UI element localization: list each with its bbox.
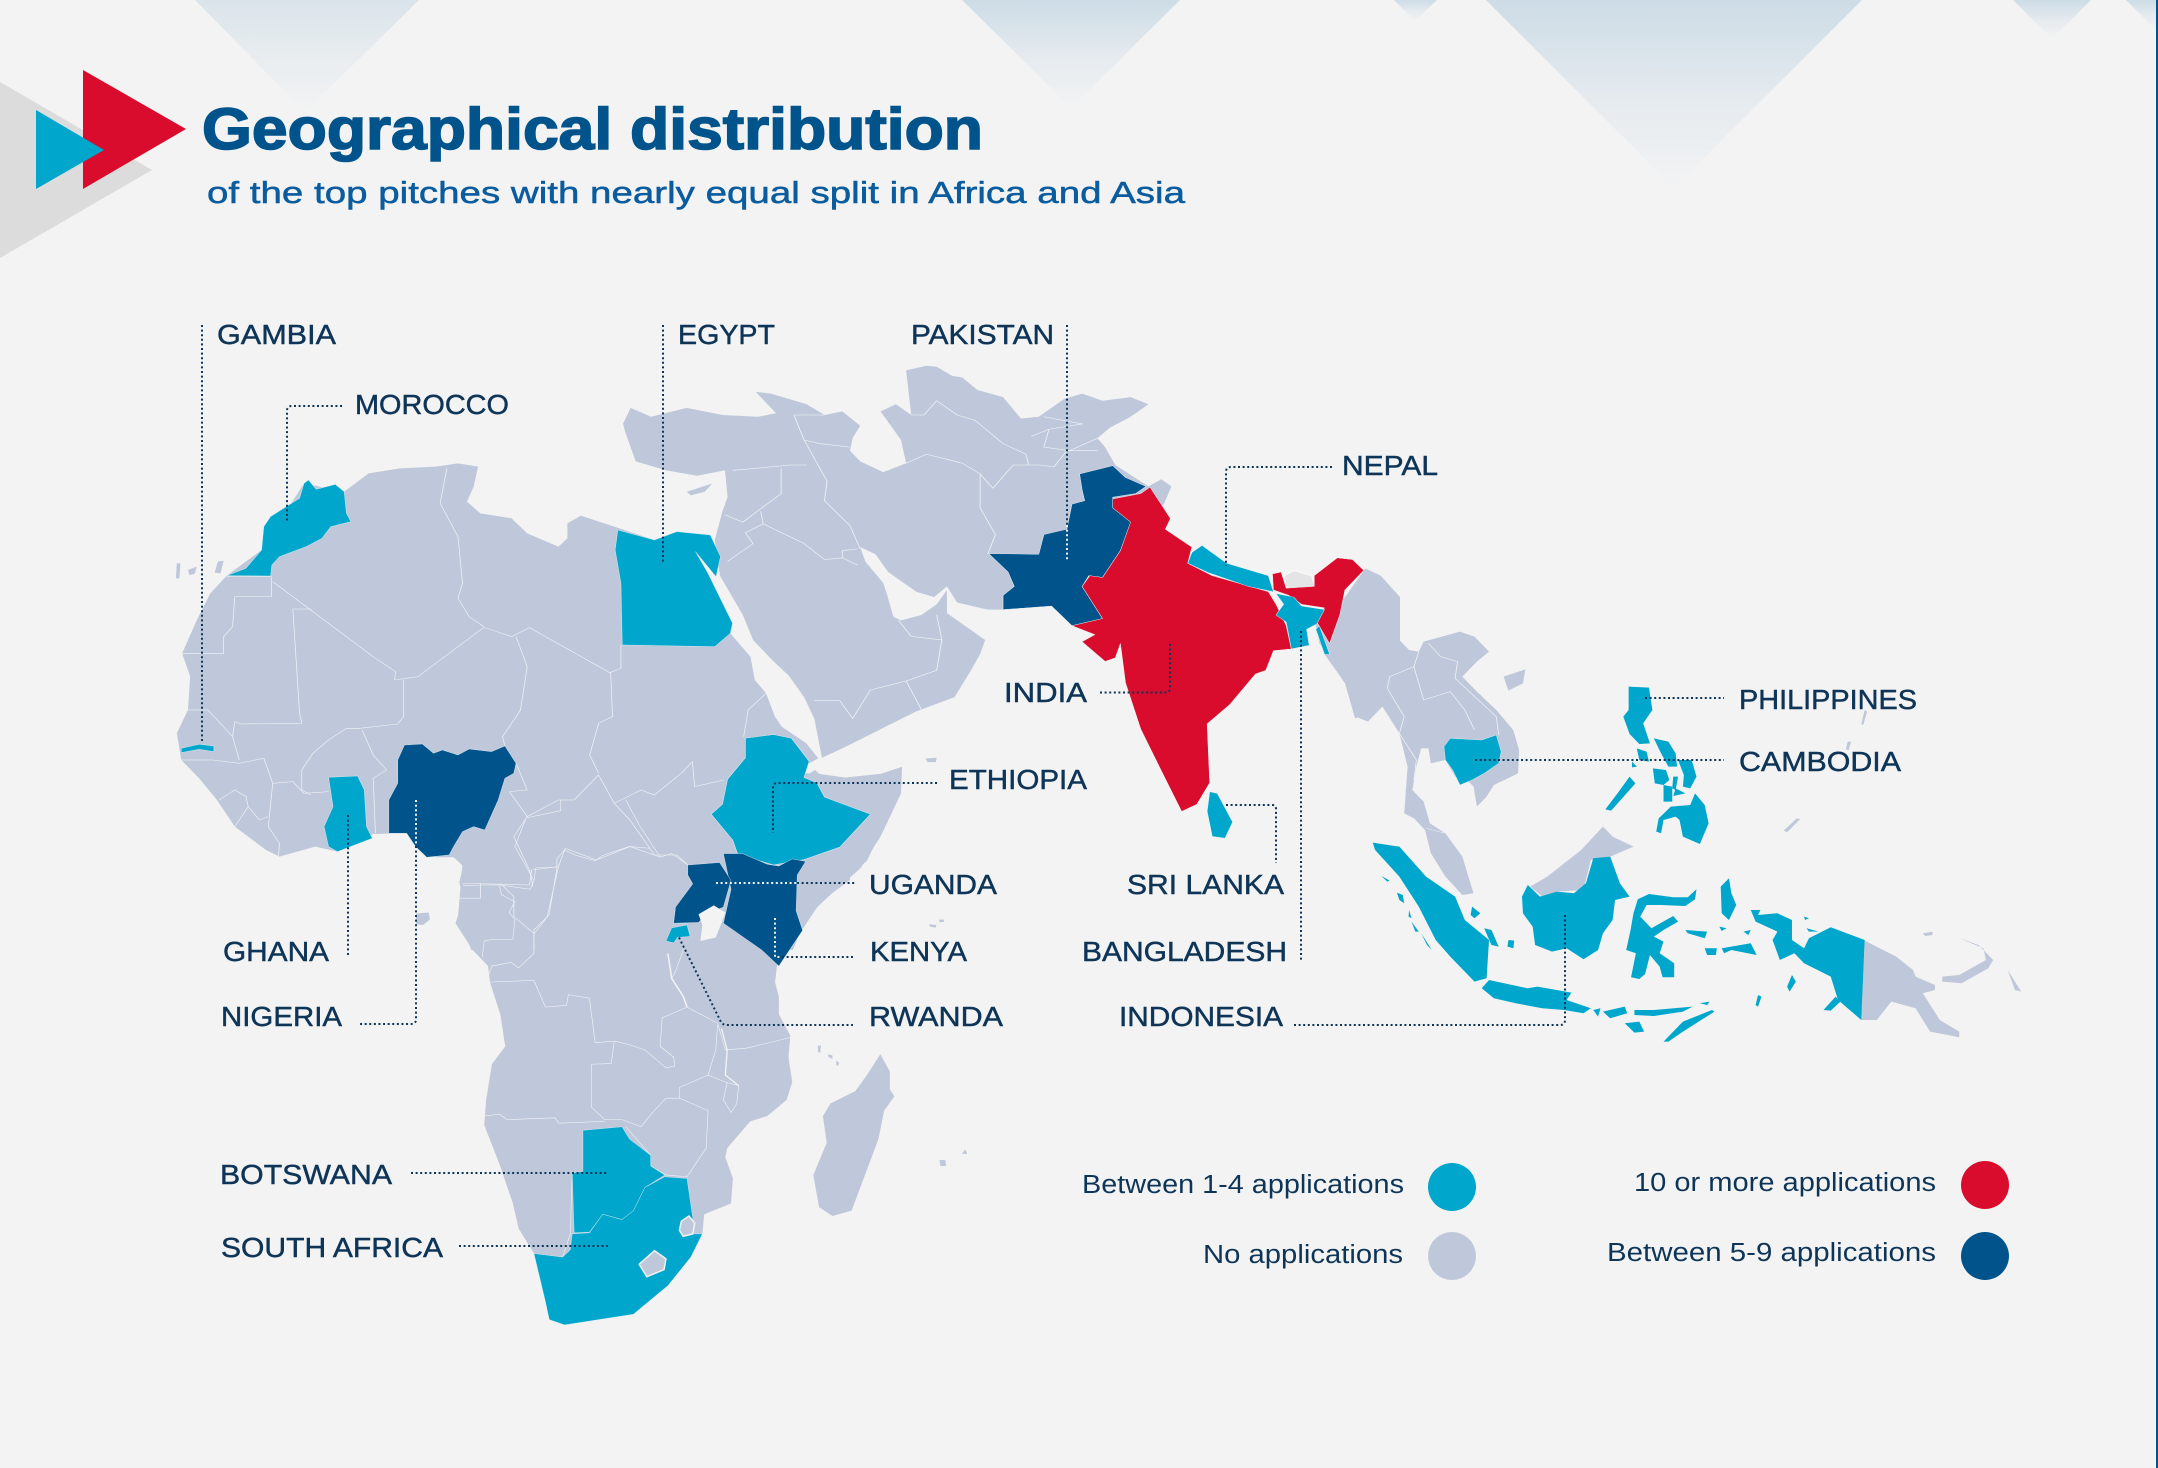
callout: Ghana: GHANA [223, 936, 330, 967]
borders: Middle East and Central Asia [725, 401, 1097, 719]
callout: Indonesia: INDONESIA [1119, 1001, 1284, 1032]
country: Cambodia [1444, 735, 1501, 785]
country: Morocco [227, 480, 351, 576]
legend item: no applications: No applications [1203, 1241, 1403, 1269]
callout: Sri Lanka [1127, 805, 1285, 900]
country: India [1072, 487, 1364, 811]
country: Nigeria [389, 744, 516, 857]
land: South-East Asia and New Guinea [1315, 620, 2021, 1037]
callout: Uganda: UGANDA [869, 869, 998, 900]
callout: Pakistan: PAKISTAN [911, 319, 1054, 350]
country: Egypt [615, 530, 733, 647]
background triangles [195, 0, 2156, 188]
right edge bar [2156, 0, 2158, 1468]
callout: Nepal: NEPAL [1342, 450, 1438, 481]
borders: north and west Africa [181, 468, 766, 950]
country: Indonesia [1373, 843, 1865, 1042]
legend item: between 1-4 applications [1082, 1163, 1476, 1211]
subtitle: of the top pitches with nearly equal split in Africa and Asia [207, 175, 1186, 210]
country: Nepal [1188, 545, 1273, 592]
countries: Kenya and Uganda [674, 854, 806, 966]
map [176, 366, 2021, 1325]
logo arrows [0, 70, 186, 258]
country: Sri Lanka [1207, 792, 1233, 838]
countries: South Africa and Botswana [534, 1127, 702, 1325]
callout: Nigeria: NIGERIA [221, 1001, 343, 1032]
callout: Nigeria [221, 800, 416, 1032]
callout: Sri Lanka: SRI LANKA [1127, 869, 1285, 900]
callout: Botswana: BOTSWANA [220, 1159, 393, 1190]
title: Geographical distribution [202, 97, 983, 162]
country: Gambia [181, 744, 214, 753]
land: central and southern Africa [416, 800, 967, 1325]
legend item: between 1-4 applications: Between 1-4 applications [1082, 1171, 1404, 1199]
borders: South-East Asia [1387, 643, 1499, 833]
lake Victoria [699, 905, 725, 941]
legend item: 10 or more applications: 10 or more applications [1634, 1169, 1936, 1197]
land: north and west Africa [176, 463, 850, 950]
callout: Morocco: MOROCCO [355, 389, 509, 420]
legend item: 10 or more applications [1634, 1161, 2009, 1209]
country: Ghana [324, 776, 372, 852]
callout: Rwanda [679, 938, 1004, 1032]
callout: Philippines: PHILIPPINES [1739, 684, 1917, 715]
callout: Gambia: GAMBIA [217, 319, 337, 350]
country: Philippines [1605, 687, 1709, 844]
callout: Cambodia: CAMBODIA [1739, 746, 1902, 777]
callout: Bangladesh: BANGLADESH [1082, 936, 1287, 967]
country: Rwanda [666, 925, 690, 943]
borders: central and southern Africa [459, 800, 790, 1257]
callout: Nepal [1226, 450, 1438, 566]
callout: Egypt: EGYPT [678, 319, 775, 350]
callout: Morocco [287, 389, 509, 523]
callout: Indonesia [1119, 915, 1565, 1032]
callout: Ethiopia [773, 764, 1088, 833]
callout: Kenya: KENYA [870, 936, 968, 967]
country: Ethiopia [711, 735, 870, 865]
callout: Ethiopia: ETHIOPIA [949, 764, 1088, 795]
enclaves: Swaziland and Lesotho [639, 1216, 695, 1277]
legend [1082, 1161, 2009, 1280]
legend item: between 5-9 applications [1607, 1232, 2009, 1280]
country: Bangladesh [1276, 594, 1330, 654]
land: Middle East and Central Asia [623, 366, 1400, 900]
legend item: no applications [1203, 1232, 1476, 1280]
callout: South Africa: SOUTH AFRICA [221, 1232, 444, 1263]
country: Bhutan [1284, 570, 1316, 588]
legend item: between 5-9 applications: Between 5-9 applications [1607, 1239, 1936, 1267]
callout: Kenya [775, 918, 968, 967]
callout: India: INDIA [1004, 677, 1088, 708]
callout: India [1004, 642, 1170, 708]
country: Pakistan [989, 466, 1146, 626]
callout: Rwanda: RWANDA [869, 1001, 1004, 1032]
